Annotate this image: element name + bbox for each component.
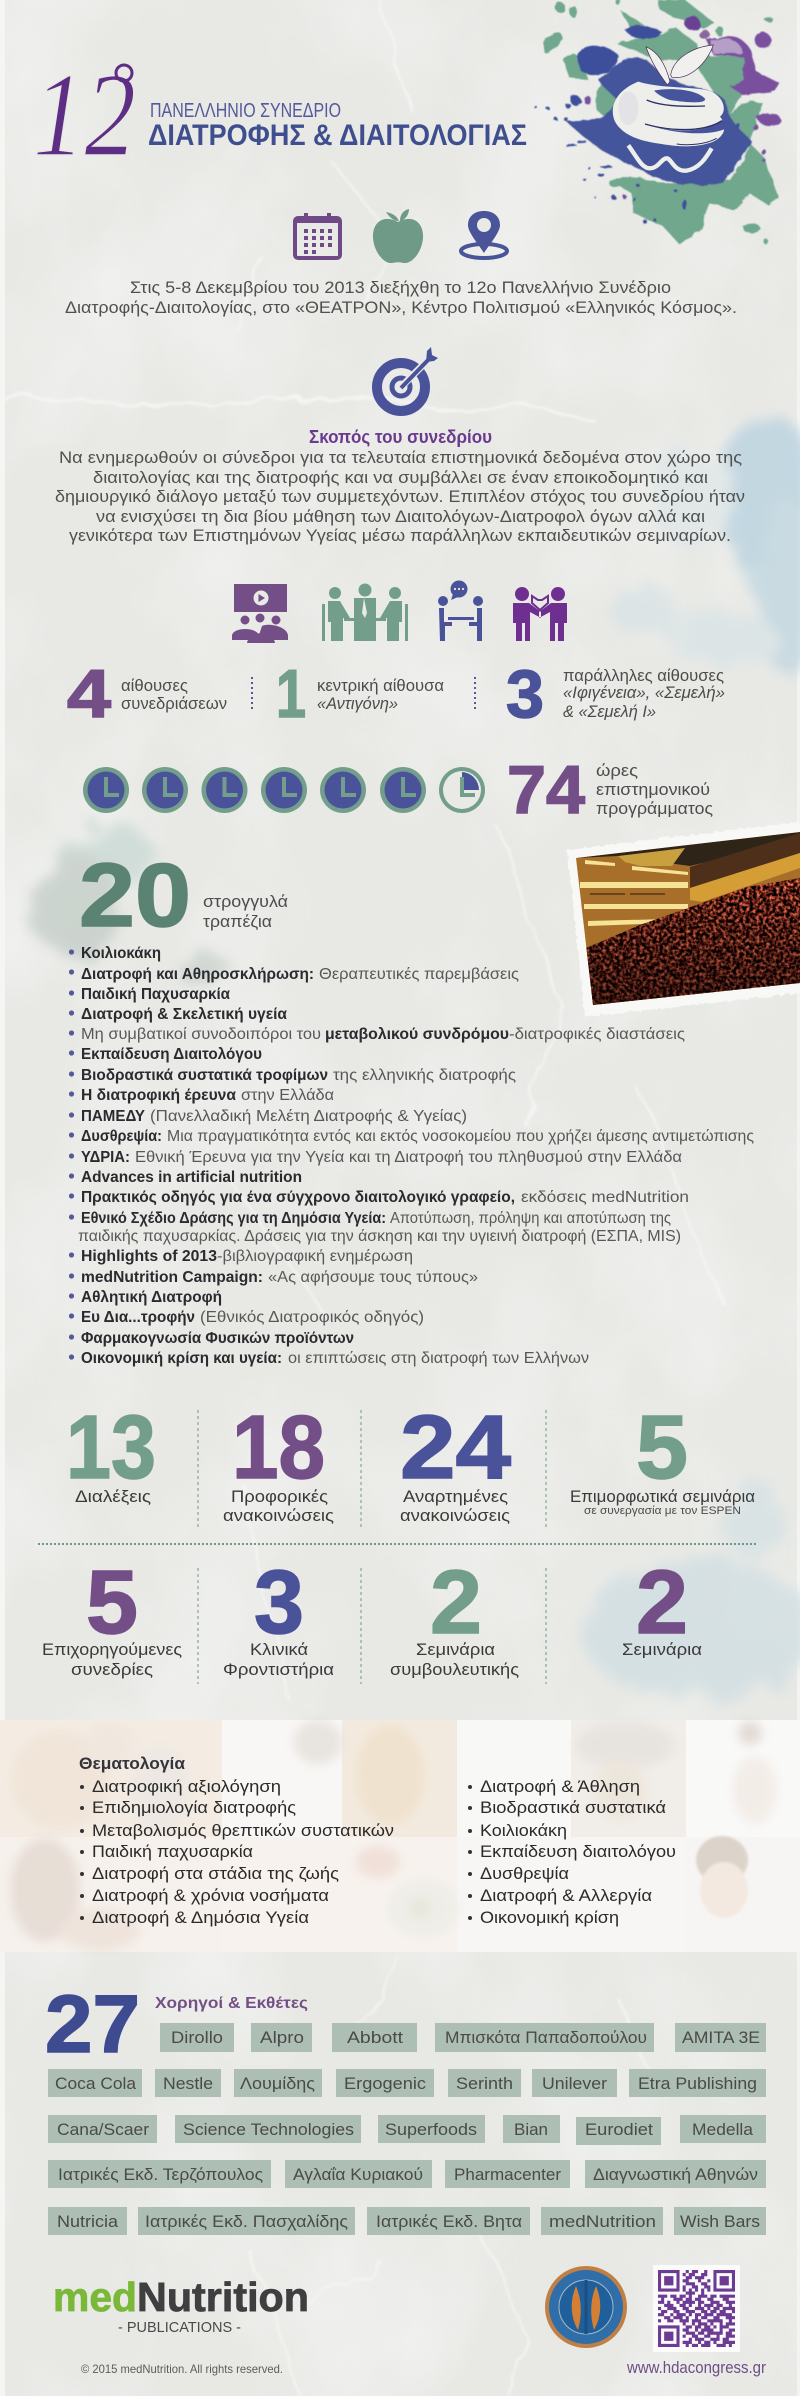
stat: clinical tutorials: Κλινικά [250, 1640, 308, 1659]
tag: Ιατρικές Εκδ. Πασχαλίδης [145, 2212, 348, 2231]
stat: 4 rooms [67, 656, 227, 732]
logo: medNutrition publications: Nutrition [137, 2274, 309, 2320]
icon: white apple [613, 45, 727, 171]
list item: «Ας αφήσουμε τους τύπους» [268, 1269, 478, 1286]
tag [336, 2069, 434, 2097]
tag [541, 2207, 663, 2235]
stat: 74 hours: επιστημονικού [596, 780, 710, 799]
intro text: Στις 5-8 Δεκεμβρίου του 2013 διεξήχθη το 12ο Πανελλήνιο Συνέδριο [130, 278, 671, 297]
stat: seminars: Σεμινάρια [622, 1640, 702, 1659]
website url: www.hdacongress.gr [626, 2358, 766, 2377]
tag [138, 2207, 355, 2235]
tag [675, 2023, 766, 2052]
decorative blue splash: upper right [613, 415, 800, 675]
stat: 3 parallel rooms: & «Σεμελή Ι» [563, 702, 656, 721]
tag: Alpro [260, 2028, 304, 2047]
stat: counselling seminars: συμβουλευτικής [390, 1660, 519, 1679]
stat: 27 sponsors: 27 [45, 1979, 140, 2070]
list: topics left column: Επιδημιολογία διατροφής [92, 1798, 296, 1817]
list item: Διατροφή & Σκελετική υγεία [81, 1006, 287, 1023]
list item: Εκπαίδευση Διαιτολόγου [81, 1046, 262, 1063]
list item: παιδικής παχυσαρκίας. Δράσεις για την άσκηση και την υγιεινή διατροφή (ΕΣΠΑ, MIS) [78, 1228, 681, 1245]
list: topics left column: Διατροφή & Δημόσια Υγεία [92, 1908, 309, 1927]
list item: Μια πραγματικότητα εντός και εκτός νοσοκομείου που χρήζει άμεσης αντιμετώπισης [167, 1128, 754, 1145]
title: conference name [148, 100, 527, 152]
list: topics left column: Διατροφική αξιολόγηση [92, 1777, 281, 1796]
stat: seminars: 2 [636, 1553, 688, 1653]
stat: 4 rooms: συνεδριάσεων [121, 694, 227, 713]
list: topics right column [468, 1777, 676, 1927]
panel: topics over pale photo collage [0, 1720, 800, 1952]
list: topics left column: Διατροφή & χρόνια νοσήματα [92, 1886, 329, 1905]
list item: Οικονομική κρίση και υγεία: [81, 1350, 282, 1367]
stats grid dividers [38, 1410, 758, 1684]
list item: Εθνική Έρευνα για την Υγεία και τη Διατροφή του πληθυσμού στην Ελλάδα [135, 1149, 682, 1166]
conference logo [535, 0, 782, 245]
stat: sponsored sessions [42, 1553, 182, 1679]
tag: Serinth [456, 2074, 513, 2093]
list item: Βιοδραστικά συστατικά τροφίμων [81, 1067, 328, 1084]
stat: 20 round tables: τραπέζια [203, 912, 272, 931]
list item: (Εθνικός Διατροφικός οδηγός) [200, 1309, 424, 1326]
decorative green splash behind 20 [29, 825, 229, 994]
tag: Διαγνωστική Αθηνών [593, 2165, 758, 2184]
list item [81, 966, 519, 983]
icon: meeting group [322, 584, 408, 641]
tag: Λουμίδης [240, 2074, 315, 2093]
tag: Superfoods [385, 2120, 477, 2139]
stat: 20 round tables [79, 846, 288, 946]
tag: AMITA 3E [682, 2028, 760, 2047]
list: topics left column [80, 1777, 394, 1927]
list item [81, 1309, 424, 1326]
stat: seminars [622, 1553, 702, 1659]
tag: Eurodiet [585, 2120, 653, 2139]
stat: 4 rooms: αίθουσες [121, 676, 188, 695]
tag: Coca Cola [55, 2074, 137, 2093]
list: topics left column: Παιδική παχυσαρκία [92, 1842, 253, 1861]
list item: Εθνικό Σχέδιο Δράσης για τη Δημόσια Υγεία: [81, 1210, 386, 1227]
stat: 4 rooms: 4 [67, 656, 111, 732]
stat: 74 hours: 74 [507, 752, 585, 828]
tag [435, 2023, 654, 2052]
list item: Advances in artificial nutrition [81, 1169, 302, 1186]
list item: Δυσθρεψία: [81, 1128, 162, 1145]
tag: Αγλαΐα Κυριακού [293, 2165, 423, 2184]
text block: purpose [55, 448, 745, 545]
tag [332, 2023, 417, 2052]
heading: topics: Θεματολογία [79, 1754, 186, 1773]
tag: Ergogenic [344, 2074, 427, 2093]
list item [78, 1210, 681, 1245]
stat: oral presentations: 18 [232, 1398, 325, 1498]
heading: sponsors: Χορηγοί & Εκθέτες [155, 1995, 308, 2012]
tag [367, 2207, 530, 2235]
icon: handshake [513, 587, 567, 641]
icon: meeting with speech bubble [438, 580, 483, 641]
list: topics right column: Οικονομική κρίση [480, 1908, 619, 1927]
icon: calendar [295, 213, 340, 258]
stat: 20 round tables: 20 [79, 846, 191, 946]
stat: sponsored sessions: 5 [86, 1553, 138, 1653]
title: 12th: 12 [33, 48, 136, 181]
list item: Παιδική Παχυσαρκία [81, 986, 230, 1003]
list item [81, 1248, 413, 1265]
list: topics right column: Δυσθρεψία [480, 1864, 569, 1883]
tag: Nutricia [57, 2212, 119, 2231]
stat: 1 main room: «Αντιγόνη» [317, 694, 398, 713]
tag: Pharmacenter [454, 2165, 561, 2184]
tag [155, 2069, 221, 2097]
stat: training seminars [570, 1398, 755, 1517]
logo: association seal [545, 2266, 627, 2348]
decorative blue splash: statistics [580, 1480, 800, 1700]
list item [81, 1350, 589, 1367]
stat: 74 hours: προγράμματος [596, 799, 713, 818]
tag [285, 2160, 432, 2188]
tag [48, 2160, 271, 2188]
stat: training seminars: 5 [636, 1398, 688, 1498]
list item: ΠΑΜΕΔΥ [81, 1108, 145, 1125]
text block: purpose: δημιουργικό διάλογο μεταξύ των συμμετεχόντων. Επιπλέον στόχος του συνεδρίου ήταν [55, 487, 745, 506]
stat: lectures: Διαλέξεις [75, 1487, 151, 1506]
list: topics right column: Εκπαίδευση διαιτολόγου [480, 1842, 676, 1861]
list: topics left column: Διατροφή στα στάδια της ζωής [92, 1864, 339, 1883]
stat: 20 round tables: στρογγυλά [203, 892, 288, 911]
tag [234, 2069, 322, 2097]
icon row: clocks [83, 767, 485, 813]
list item: Αθλητική Διατροφή [81, 1289, 222, 1306]
icon: presentation audience [232, 584, 288, 643]
list: topics right column: Βιοδραστικά συστατικά [480, 1798, 666, 1817]
tag: Ιατρικές Εκδ. Βητα [376, 2212, 522, 2231]
intro text: Διατροφής-Διαιτολογίας, στο «ΘΕΑΤΡΟΝ», Κέντρο Πολιτισμού «Ελληνικός Κόσμος». [65, 298, 737, 317]
list item: ΥΔΡΙΑ: [81, 1149, 130, 1166]
tag [448, 2069, 521, 2097]
tag [378, 2115, 485, 2143]
logo: medNutrition publications: med [53, 2274, 137, 2320]
list: round table topics [69, 945, 754, 1367]
stat: training seminars: σε συνεργασία με τον ESPEN [584, 1505, 741, 1517]
tag [175, 2115, 361, 2143]
stat: 1 main room: κεντρική αίθουσα [317, 676, 444, 695]
tag: Cana/Scaer [57, 2120, 149, 2139]
stat: posters: ανακοινώσεις [400, 1506, 510, 1525]
photo collage [0, 1720, 800, 1952]
stat: sponsored sessions: Επιχορηγούμενες [42, 1640, 182, 1659]
stat: oral presentations: ανακοινώσεις [223, 1506, 334, 1525]
list item [81, 1269, 478, 1286]
title: conference name: ΔΙΑΤΡΟΦΗΣ & ΔΙΑΙΤΟΛΟΓΙΑΣ [148, 119, 527, 152]
title: conference name: ΠΑΝΕΛΛΗΝΙΟ ΣΥΝΕΔΡΙΟ [150, 100, 341, 122]
qr code [653, 2265, 740, 2352]
sponsor tags [48, 2023, 766, 2235]
tag [532, 2069, 617, 2097]
tag [48, 2207, 127, 2235]
tag: Wish Bars [680, 2212, 760, 2231]
tag [160, 2023, 234, 2052]
stat: 1 main room [276, 656, 444, 732]
text block: purpose: διαιτολογίας και της διατροφής και να συμβάλλει σε έναν εποικοδομητικό και [93, 468, 708, 487]
list item: Κοιλιοκάκη [81, 945, 161, 962]
text block: purpose: να ενισχύσει τη δια βίου μάθηση των Διαιτολόγων-Διατροφολ όγων αλλά και [96, 507, 705, 526]
list item: εκδόσεις medNutrition [521, 1189, 689, 1206]
list item: στην Ελλάδα [241, 1087, 334, 1104]
tag: Unilever [542, 2074, 607, 2093]
photo: conference hall [567, 822, 800, 1017]
list item: μεταβολικού συνδρόμου [325, 1026, 509, 1043]
stat: 74 hours: ώρες [596, 761, 638, 780]
list item: -βιβλιογραφική ενημέρωση [217, 1248, 413, 1265]
tag: Dirollo [171, 2028, 223, 2047]
tag [48, 2115, 157, 2143]
list item [81, 1087, 334, 1104]
list item: Πρακτικός οδηγός για ένα σύγχρονο διαιτολογικό γραφείο, [81, 1189, 515, 1206]
tag: Etra Publishing [638, 2074, 757, 2093]
stat: oral presentations: Προφορικές [231, 1487, 328, 1506]
stat: counselling seminars: 2 [430, 1553, 482, 1653]
stat: 3 parallel rooms [506, 656, 725, 732]
stat: counselling seminars [390, 1553, 519, 1679]
stat: posters: Αναρτημένες [403, 1487, 508, 1506]
list item: Φαρμακογνωσία Φυσικών προϊόντων [81, 1330, 354, 1347]
copyright: © 2015 medNutrition. All rights reserved. [81, 2362, 283, 2376]
list item: οι επιπτώσεις στη διατροφή των Ελλήνων [288, 1350, 589, 1367]
logo: medNutrition publications [53, 2274, 309, 2336]
list item: Η διατροφική έρευνα [81, 1087, 236, 1104]
list item: (Πανελλαδική Μελέτη Διατροφής & Υγείας) [150, 1108, 467, 1125]
tag [251, 2023, 312, 2052]
tag: Medella [692, 2120, 754, 2139]
stat: clinical tutorials: Φροντιστήρια [223, 1660, 334, 1679]
text block: purpose: γενικότερα των Επιστημόνων Υγείας μέσω παράλληλων εκπαιδευτικών σεμιναρίων. [69, 526, 731, 545]
list item: της ελληνικής διατροφής [333, 1067, 516, 1084]
list item: Μη συμβατικοί συνοδοιπόροι του [81, 1026, 321, 1043]
tag: Μπισκότα Παπαδοπούλου [445, 2028, 647, 2047]
tag: medNutrition [549, 2212, 656, 2231]
stat: lectures: 13 [66, 1398, 156, 1498]
stat: counselling seminars: Σεμινάρια [416, 1640, 495, 1659]
tag: Bian [514, 2120, 548, 2139]
stat: 74 hours [507, 752, 713, 828]
tag: Ιατρικές Εκδ. Τερζόπουλος [58, 2165, 263, 2184]
list item: Θεραπευτικές παρεμβάσεις [319, 966, 519, 983]
list: topics right column: Διατροφή & Άθληση [480, 1777, 640, 1796]
stat: posters: 24 [400, 1398, 511, 1498]
list item: Ευ Δια...τροφήν [81, 1309, 195, 1326]
tag: Science Technologies [183, 2120, 354, 2139]
tag [629, 2069, 766, 2097]
icon: apple [373, 209, 423, 263]
list item: -διατροφικές διαστάσεις [509, 1026, 685, 1043]
tag: Abbott [347, 2028, 403, 2047]
list: topics right column: Διατροφή & Αλλεργία [480, 1886, 652, 1905]
tag [576, 2117, 661, 2145]
list: topics right column: Κοιλιοκάκη [480, 1821, 567, 1840]
tag [585, 2160, 766, 2188]
stat: 3 parallel rooms: 3 [506, 656, 544, 732]
list item: Highlights of 2013 [81, 1248, 217, 1265]
stat: sponsored sessions: συνεδρίες [71, 1660, 153, 1679]
tag [503, 2115, 560, 2143]
icon: location pin [461, 211, 507, 258]
list item [81, 1067, 516, 1084]
logo: medNutrition publications: - PUBLICATIONS - [118, 2319, 241, 2336]
stat: 1 main room: 1 [276, 656, 306, 732]
list item [81, 1026, 685, 1043]
list: topics left column: Μεταβολισμός θρεπτικών συστατικών [92, 1821, 394, 1840]
heading: purpose: Σκοπός του συνεδρίου [309, 427, 492, 447]
stat: clinical tutorials [223, 1553, 334, 1679]
intro text [65, 278, 737, 317]
bullets column [69, 949, 74, 1360]
tag [48, 2069, 142, 2097]
icon: ink splash [535, 0, 782, 245]
icon: target [377, 347, 438, 411]
stat: clinical tutorials: 3 [254, 1553, 304, 1653]
list item: Διατροφή και Αθηροσκλήρωση: [81, 966, 314, 983]
tag [445, 2160, 570, 2188]
text block: purpose: Να ενημερωθούν οι σύνεδροι για τα τελευταία επιστημονικά δεδομένα στον χώρο της [59, 448, 742, 467]
tag [674, 2207, 766, 2235]
stat: 3 parallel rooms: «Ιφιγένεια», «Σεμελή» [563, 683, 725, 702]
stat: training seminars: Επιμορφωτικά σεμινάρια [570, 1487, 755, 1506]
tag [680, 2115, 766, 2143]
list item: Αποτύπωση, πρόληψη και αποτύπωση της [390, 1210, 671, 1227]
stat: 3 parallel rooms: παράλληλες αίθουσες [563, 666, 724, 685]
list item: medNutrition Campaign: [81, 1269, 263, 1286]
tag: Nestle [163, 2074, 213, 2093]
